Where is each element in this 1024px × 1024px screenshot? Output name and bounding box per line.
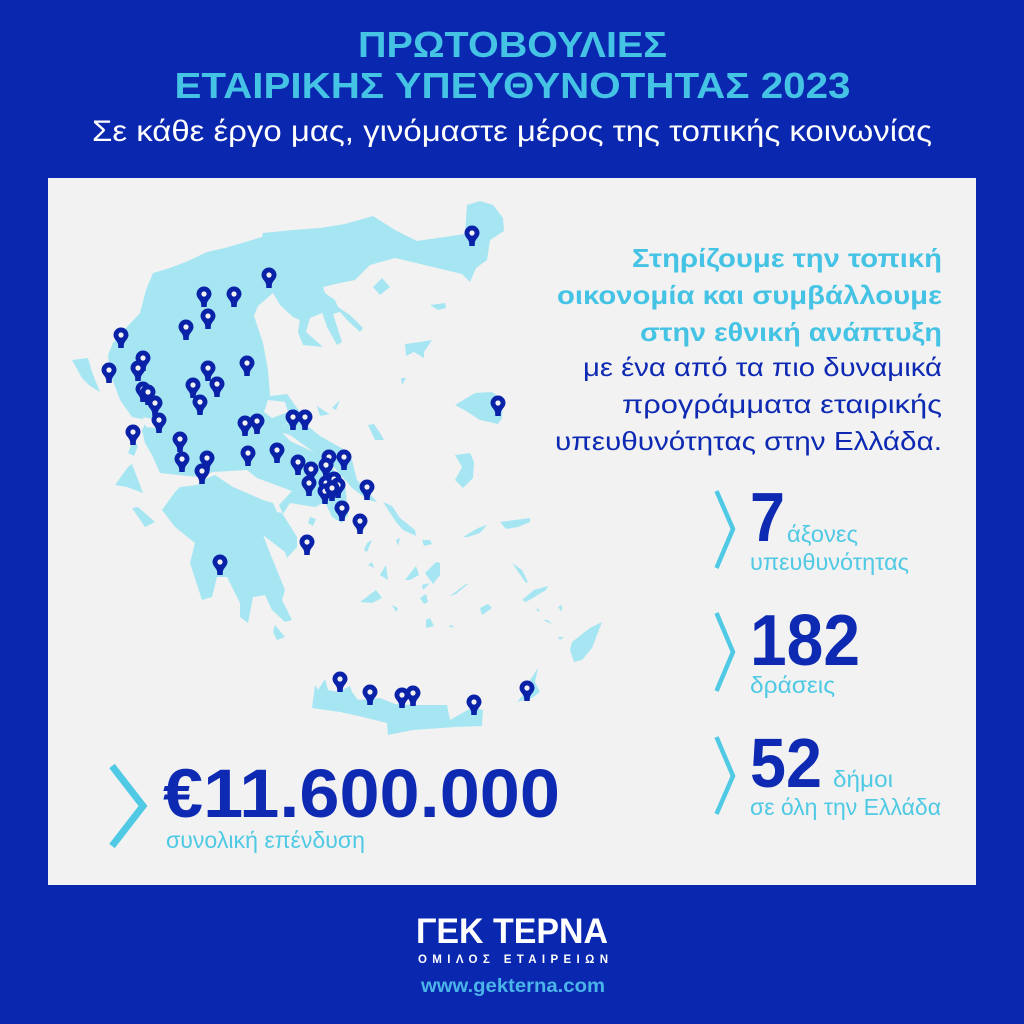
chevron [716,613,733,691]
Karpathos [517,668,540,702]
map of Greece [72,201,602,735]
stat: 52 municipalities: δήμοι [833,766,893,792]
chevron [716,737,733,814]
Kefalonia [115,464,143,493]
Zakynthos [132,507,155,527]
subtitle: Σε κάθε έργο μας, γινόμαστε μέρος της τοπικής κοινωνίας [92,115,932,148]
logo: ΓΕΚ ΤΕΡΝΑ: ΟΜΙΛΟΣ ΕΤΑΙΡΕΙΩΝ [418,954,608,966]
Kythira [273,625,285,640]
Sithonia peninsula [322,312,342,345]
Chios [455,453,474,488]
stat: total investment: συνολική επένδυση [166,827,365,853]
Lefkada [128,440,138,456]
stat: total investment: €11.600.000 [163,755,560,832]
stat: 52 municipalities [716,724,941,820]
title: ΕΤΑΙΡΙΚΗΣ ΥΠΕΥΘΥΝΟΤΗΤΑΣ 2023 [174,65,850,106]
Evia [273,420,377,502]
stat: total investment [112,755,560,853]
intro text: υπευθυνότητας στην Ελλάδα. [555,426,942,456]
stat: 182 actions [716,601,860,698]
mainland [108,201,504,523]
website: www.gekterna.com [420,976,605,997]
Lesvos [455,392,503,424]
chevron [716,491,733,568]
Samothraki [430,303,446,310]
Skyros and Sporades [368,424,384,440]
stat: 182 actions: δράσεις [750,672,835,698]
stat: 7 axes: 7 [750,478,785,556]
title [174,24,850,106]
inland gulfs [143,400,316,526]
Peloponnese [162,475,297,623]
title: ΠΡΩΤΟΒΟΥΛΙΕΣ [358,24,667,65]
stat: 182 actions: 182 [750,601,860,681]
stat: 7 axes: υπευθυνότητας [750,549,909,575]
intro text: Στηρίζουμε την τοπική [632,243,942,273]
intro text: οικονομία και συμβάλλουμε [557,280,942,310]
Thasos [373,278,390,295]
intro text: προγράμματα εταιρικής [622,389,942,419]
Rhodes [570,622,602,662]
Crete [312,679,483,735]
intro text [555,243,942,456]
stat: 52 municipalities: σε όλη την Ελλάδα [750,794,941,820]
Limnos [405,340,432,358]
Corfu [72,358,100,392]
stat: 7 axes: άξονες [787,521,858,547]
Cyclades [383,502,416,536]
Samos and Ikaria [500,518,530,529]
Cassandra peninsula [298,318,323,347]
stat: 7 axes [716,478,909,575]
panel: white content card [48,178,976,885]
stat: 52 municipalities: 52 [750,724,822,802]
chevron [112,766,143,846]
intro text: στην εθνική ανάπτυξη [640,317,942,347]
Dodecanese [512,563,528,583]
logo: ΓΕΚ ΤΕΡΝΑ: ΓΕΚ ΤΕΡΝΑ [416,912,608,951]
intro text: με ένα από τα πιο δυναμικά [583,352,942,382]
location pins [102,226,534,715]
